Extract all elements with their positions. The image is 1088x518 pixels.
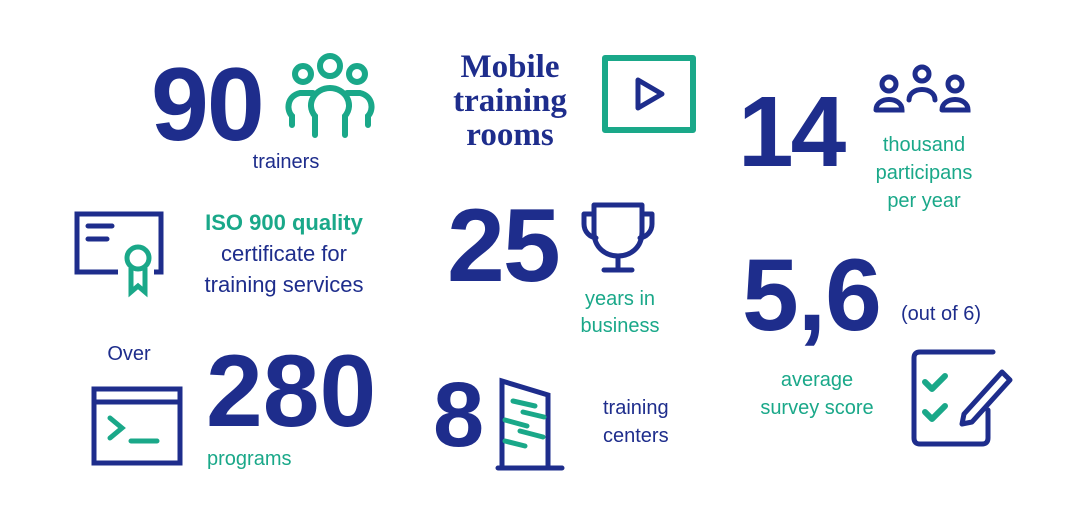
stat: mobile training rooms (453, 49, 693, 153)
stat: ISO certificate (77, 210, 364, 297)
icon: trophy (584, 205, 652, 270)
stat: 8 training centers: centers (603, 425, 669, 447)
stat: over 280 programs: programs (207, 448, 291, 470)
icon: certificate (77, 214, 161, 292)
stat: mobile training rooms: training (453, 83, 567, 119)
stat: mobile training rooms: Mobile (461, 49, 559, 85)
stat: 25 years in business: business (581, 315, 659, 337)
icon: checklist with pen (914, 352, 1010, 444)
stat: 5,6 survey score: 5,6 (742, 238, 881, 352)
stat: 25 years in business (447, 188, 659, 337)
stat: mobile training rooms: rooms (466, 117, 554, 153)
stat: 90 trainers (151, 47, 372, 173)
stat: 14 thousand participants: per year (887, 190, 961, 212)
icon: terminal window (94, 389, 180, 463)
icon: three people (876, 67, 968, 110)
stat: 8 training centers: 8 (433, 364, 484, 466)
stat: over 280 programs: Over (107, 343, 151, 365)
stat: 8 training centers (433, 364, 669, 468)
stat: ISO certificate: ISO 900 quality (205, 210, 364, 235)
stat: ISO certificate: certificate for (221, 241, 347, 266)
stat: 14 thousand participants (738, 67, 972, 212)
stat: ISO certificate: training services (205, 272, 363, 297)
stat: 5,6 survey score (742, 238, 1010, 444)
stat: 5,6 survey score: survey score (760, 397, 874, 419)
stat: over 280 programs: 280 (206, 334, 376, 448)
stat: 14 thousand participants: participans (876, 162, 972, 184)
stat: 5,6 survey score: (out of 6) (901, 303, 981, 325)
stat: 14 thousand participants: thousand (883, 134, 965, 156)
stat: 14 thousand participants: 14 (738, 76, 847, 188)
stat: 8 training centers: training (603, 397, 669, 419)
icon: building (498, 381, 562, 468)
icon: video screen (605, 58, 693, 130)
stat: 5,6 survey score: average (781, 369, 853, 391)
icon: group of people (288, 56, 372, 135)
stat: 90 trainers: trainers (253, 151, 319, 173)
stat: 25 years in business: 25 (447, 188, 559, 304)
stat: 90 trainers: 90 (151, 47, 263, 163)
stat: over 280 programs (94, 334, 376, 470)
stat: 25 years in business: years in (585, 288, 655, 310)
